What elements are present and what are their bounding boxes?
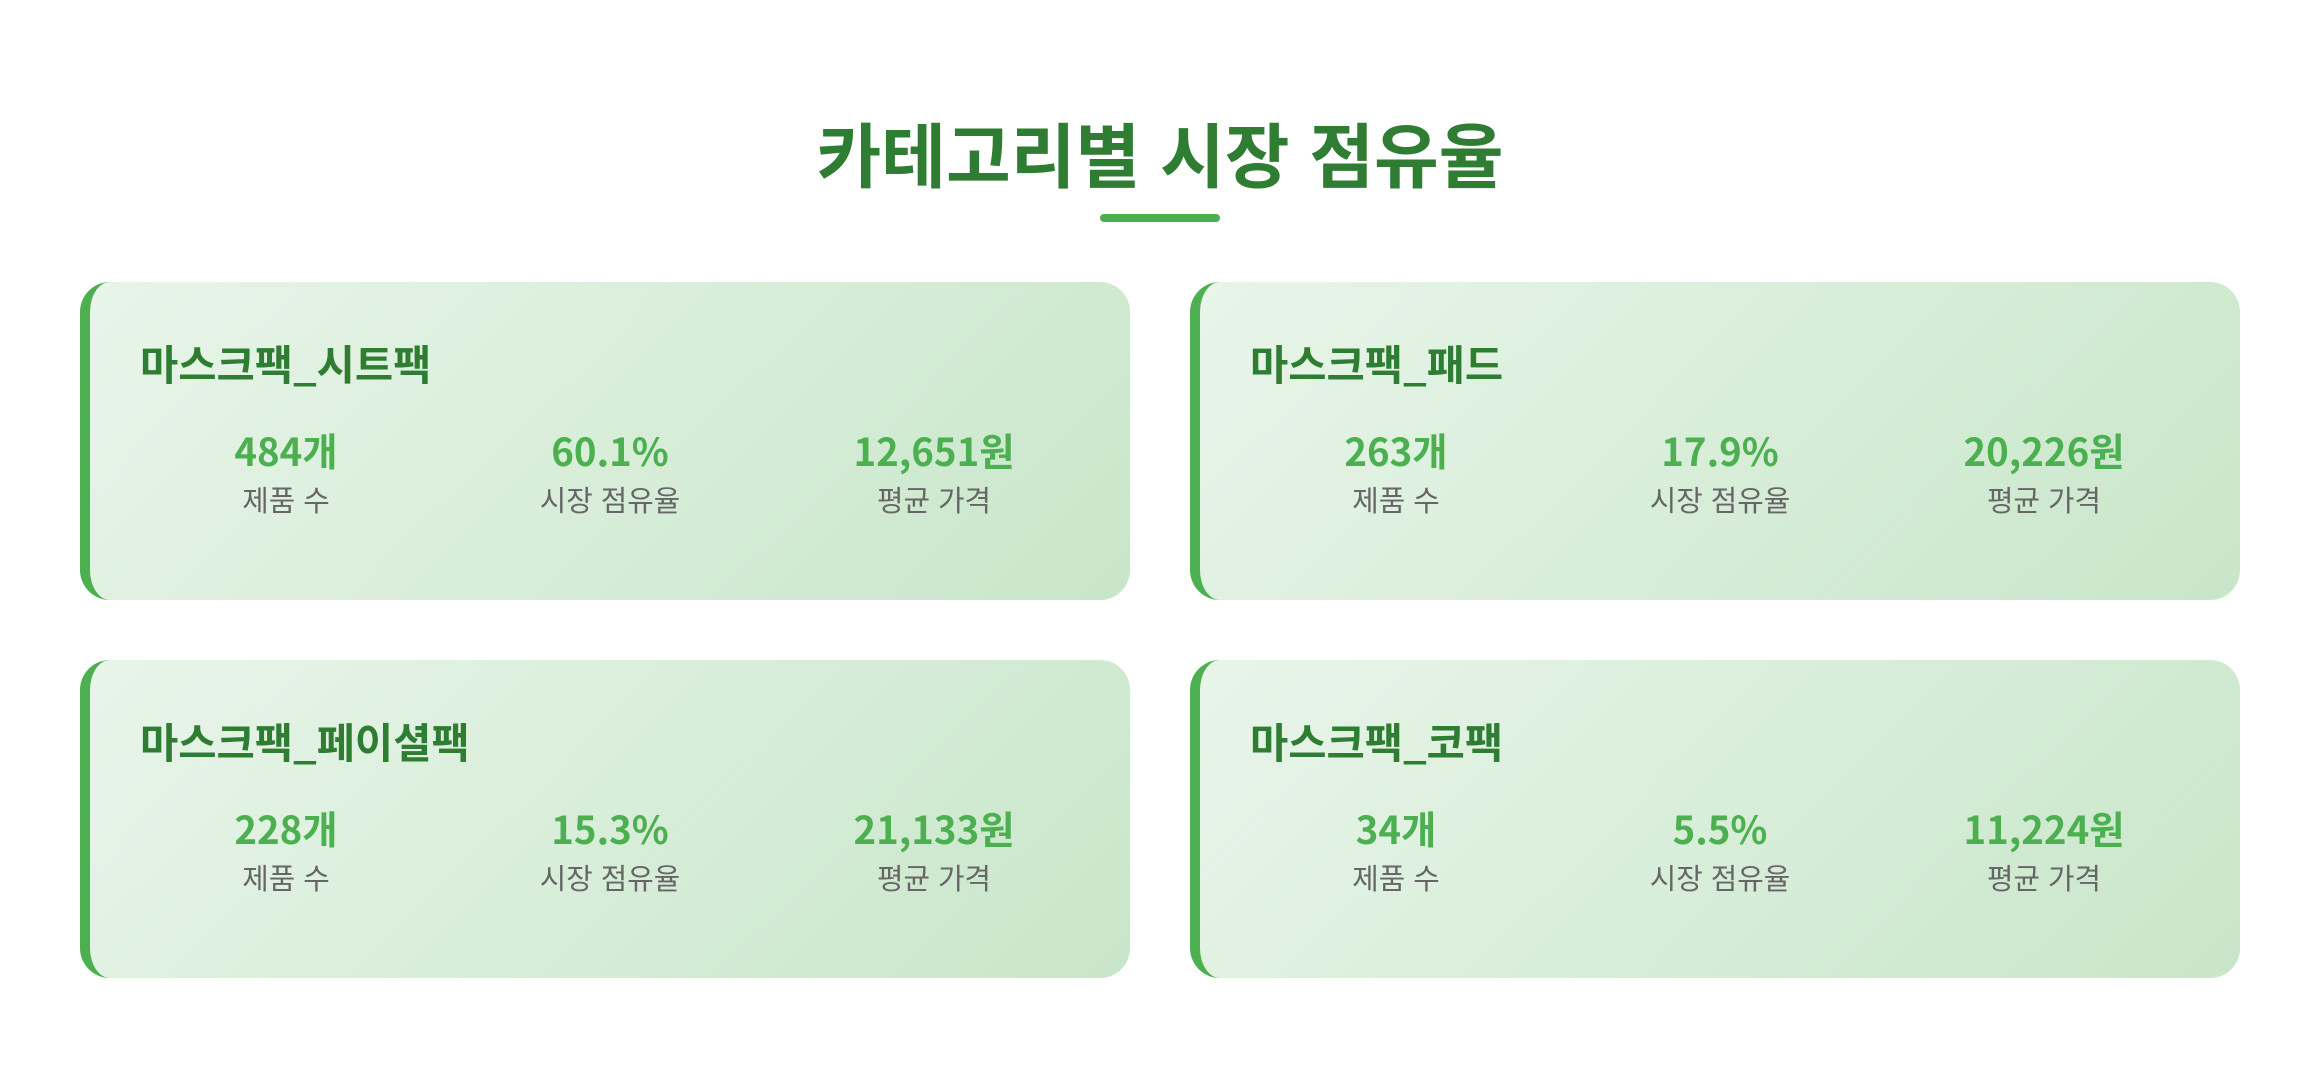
- stat: product count: 제품 수: [242, 479, 330, 520]
- stat: product count: 34개: [1356, 800, 1436, 856]
- panel heading: 마스크팩_코팩: [1250, 710, 1503, 770]
- stat: market share: 5.5%: [1673, 800, 1767, 856]
- panel: 마스크팩_코팩: [1190, 660, 2240, 978]
- panel heading: 마스크팩_페이셜팩: [140, 710, 470, 770]
- stat: product count: [1352, 800, 1440, 898]
- stat: product count: 제품 수: [1352, 479, 1440, 520]
- panel: 마스크팩_페이셜팩: [80, 660, 1130, 978]
- panel heading: 마스크팩_패드: [1250, 332, 1503, 392]
- stat: product count: 228개: [234, 800, 338, 856]
- stat: average price: 평균 가격: [1987, 857, 2101, 898]
- stat: average price: [853, 800, 1015, 898]
- stat: product count: [234, 800, 338, 898]
- stat: market share: 60.1%: [551, 422, 669, 478]
- stat: average price: 21,133원: [853, 800, 1015, 856]
- stat: average price: 평균 가격: [877, 857, 991, 898]
- stat: market share: 시장 점유율: [540, 479, 680, 520]
- stat: average price: 12,651원: [853, 422, 1015, 478]
- stat: market share: [540, 422, 680, 520]
- panel: 마스크팩_패드: [1190, 282, 2240, 600]
- stat: market share: 시장 점유율: [1650, 479, 1790, 520]
- stat: product count: 263개: [1344, 422, 1448, 478]
- stat: product count: 제품 수: [1352, 857, 1440, 898]
- stat: product count: 제품 수: [242, 857, 330, 898]
- title underline: [1100, 214, 1220, 222]
- panel heading: 마스크팩_시트팩: [140, 332, 431, 392]
- stat: average price: 평균 가격: [1987, 479, 2101, 520]
- stat: market share: [540, 800, 680, 898]
- stat: average price: 11,224원: [1963, 800, 2125, 856]
- stat: product count: 484개: [234, 422, 338, 478]
- stat: average price: [1963, 422, 2125, 520]
- stat: product count: [234, 422, 338, 520]
- stat: market share: 17.9%: [1661, 422, 1779, 478]
- stat: market share: [1650, 422, 1790, 520]
- stat: average price: [853, 422, 1015, 520]
- stat: product count: [1344, 422, 1448, 520]
- stat: market share: 시장 점유율: [540, 857, 680, 898]
- stat: market share: 15.3%: [551, 800, 669, 856]
- stat: market share: 시장 점유율: [1650, 857, 1790, 898]
- stat: market share: [1650, 800, 1790, 898]
- stat: average price: [1963, 800, 2125, 898]
- title: 카테고리별 시장 점유율: [816, 101, 1504, 203]
- stat: average price: 평균 가격: [877, 479, 991, 520]
- panel: 마스크팩_시트팩: [80, 282, 1130, 600]
- stat: average price: 20,226원: [1963, 422, 2125, 478]
